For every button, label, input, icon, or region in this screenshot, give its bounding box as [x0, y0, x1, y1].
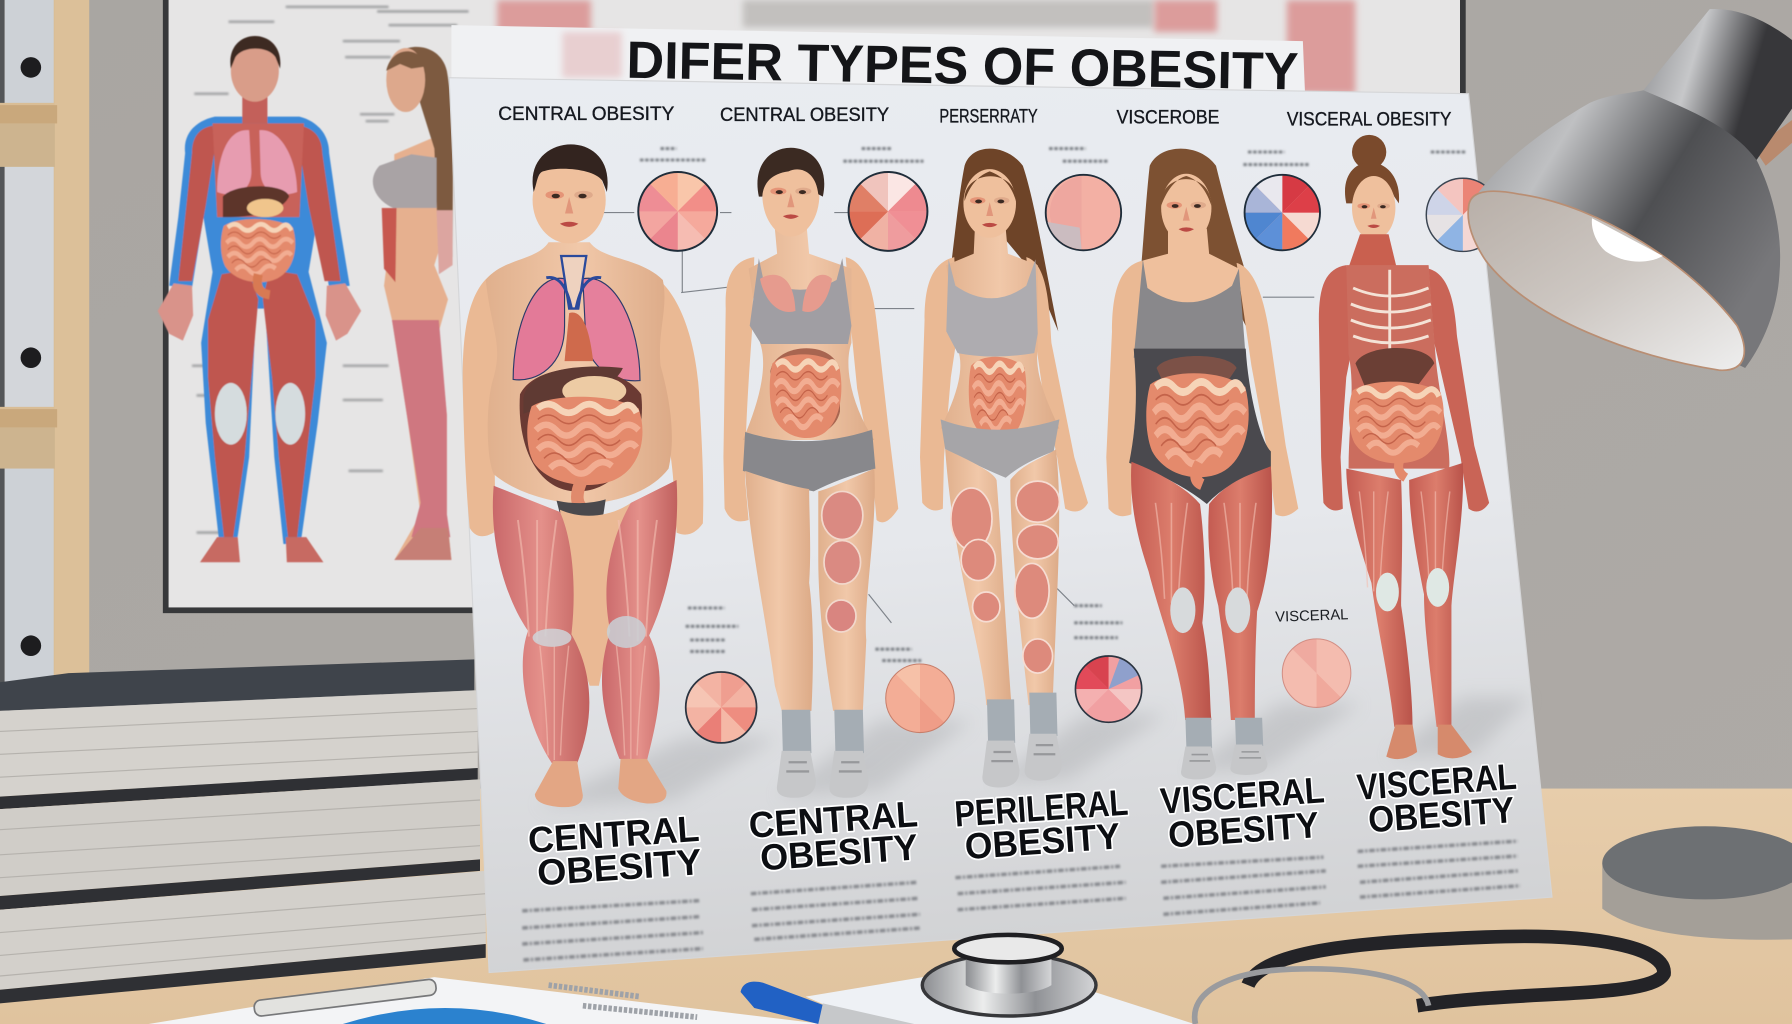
hands: [158, 283, 361, 341]
label: central obesity 2: OBESITY: [759, 826, 919, 878]
head: [963, 169, 1016, 238]
heading: visceral obesity: VISCERAL OBESITY: [1287, 109, 1451, 131]
head: [533, 157, 606, 243]
pie: lower 3: [1068, 649, 1142, 722]
heading: viscero: VISCEROBE: [1117, 106, 1219, 128]
blurred body text blocks: [522, 841, 1520, 960]
head: [762, 152, 819, 237]
pen: [741, 982, 914, 1024]
trachea and vessels: [561, 256, 586, 309]
underwear: [557, 499, 606, 519]
poster top muscle strips: [497, 0, 1355, 94]
shelf with binders: [0, 0, 89, 683]
shade neck: [1643, 9, 1792, 160]
papers on desk: [149, 963, 1194, 1024]
heading: peripheral: PERSERRATY: [939, 105, 1038, 127]
label: visceral obesity 2: OBESITY: [1367, 789, 1516, 840]
lamp base: [1602, 826, 1792, 940]
arms: [723, 257, 898, 522]
heart: [565, 313, 593, 361]
liver: [1157, 356, 1237, 389]
arms: [1319, 265, 1489, 512]
legs: [745, 471, 813, 711]
shorts: [743, 430, 875, 491]
lamp arm: [1754, 120, 1792, 166]
label: visceral obesity 2: VISCERAL: [1355, 756, 1518, 808]
shade opening: [1468, 191, 1744, 370]
callout scribbles above pies: [640, 149, 1465, 661]
figure 5: anatomy woman with bun: [1319, 135, 1489, 759]
label: visceral obesity 1: VISCERAL: [1159, 769, 1326, 822]
intestines: [1349, 382, 1444, 463]
tank top: [1134, 259, 1246, 358]
belly organ: [969, 357, 1026, 440]
shade dome: [1472, 90, 1780, 368]
background figure: front anatomy: [158, 36, 361, 562]
hair bun: [1352, 135, 1386, 169]
leg panels: [951, 481, 1059, 673]
heading: central obesity 2: CENTRAL OBESITY: [720, 104, 889, 126]
outer blue body outline: [169, 117, 350, 544]
muscle mass arms torso legs: [178, 126, 341, 281]
head: [1352, 176, 1395, 240]
pie: visceral 2: [1419, 171, 1499, 251]
title: DIFER TYPES OF OBESITY: [626, 31, 1299, 101]
abdominal cavity: [520, 369, 642, 491]
legs: [945, 449, 1011, 705]
head: [242, 89, 267, 123]
arms: [463, 274, 703, 536]
desk surface: [0, 789, 1792, 1024]
feet: [535, 761, 583, 807]
stacked books: [0, 659, 486, 1003]
lamp bulb glow: [1592, 218, 1663, 262]
figure 3: woman long hair with leg panels: [920, 149, 1088, 787]
figure 4: woman with dark shorts and muscular legs: [1106, 149, 1298, 779]
intestines: [527, 397, 642, 485]
arms: [920, 257, 1088, 512]
small visceral label: VISCERAL: [1275, 607, 1349, 626]
ribs: [1351, 270, 1431, 350]
torso: [941, 229, 1059, 429]
neck: [1349, 234, 1397, 267]
stethoscope tubing: [1195, 936, 1664, 1024]
lungs: [217, 130, 297, 195]
torso muscle: [1346, 265, 1449, 469]
arms: [1106, 261, 1298, 516]
pie: lower 1: [686, 672, 757, 750]
organs: [770, 348, 840, 436]
top: [946, 259, 1038, 357]
figure 1: obese man with organs: [463, 144, 703, 807]
stomach: [562, 376, 626, 406]
label: central obesity 2: [747, 793, 921, 879]
lungs: [513, 278, 565, 380]
pie charts: [630, 164, 1499, 750]
pie: central 1: [630, 164, 725, 259]
torso: [486, 242, 672, 504]
intestines: [1146, 373, 1249, 477]
legs: [1346, 469, 1413, 727]
lungs: [760, 275, 832, 312]
background anatomy poster: [166, 0, 1463, 610]
label: central obesity 1: [527, 808, 703, 894]
label: perileral obesity: OBESITY: [963, 815, 1121, 867]
large type labels: [527, 756, 1520, 894]
underwear: [941, 419, 1059, 478]
faint poster captions: [192, 7, 469, 533]
stethoscope chest piece: [922, 935, 1096, 1016]
torso: [743, 229, 874, 440]
pie: central 2: [840, 164, 936, 259]
leader lines: [594, 213, 1314, 623]
label: central obesity 1: OBESITY: [536, 841, 703, 893]
feet: [200, 537, 323, 562]
floor shadows under figures: [537, 697, 1531, 806]
leg muscles: [493, 486, 589, 763]
small column headings: [498, 103, 1451, 131]
top: [750, 258, 851, 344]
label: perileral obesity: [953, 782, 1132, 868]
legs: [1131, 462, 1211, 720]
background figure: side view woman: [373, 47, 453, 560]
figure 2: slim woman short hair: [723, 148, 898, 798]
hair: [1137, 149, 1264, 331]
liver: [1355, 348, 1434, 389]
label: visceral obesity 1: [1159, 769, 1328, 856]
heading: central obesity 1: CENTRAL OBESITY: [498, 103, 674, 125]
label: visceral obesity 2: [1355, 756, 1520, 841]
pie: lower 2: [886, 657, 954, 740]
label: visceral obesity 1: OBESITY: [1167, 804, 1320, 856]
pie: peripheral: [1046, 175, 1121, 250]
main poster sheet: [449, 78, 1552, 973]
head: [1161, 174, 1211, 242]
pie: lower 4: [1282, 632, 1351, 715]
liver: [523, 366, 623, 414]
shorts: [1129, 349, 1271, 504]
label: central obesity 2: CENTRAL: [747, 793, 919, 846]
label: perileral obesity: PERILERAL: [953, 782, 1129, 835]
main poster back sheet: [451, 25, 1305, 96]
feet: [1386, 725, 1472, 759]
label: central obesity 1: CENTRAL: [527, 808, 701, 861]
hair: [947, 149, 1058, 331]
desk lamp shade: [1468, 9, 1792, 370]
neck and chest: [1143, 229, 1239, 312]
thigh inner skin: [560, 503, 631, 686]
pie: visceral 1: [1237, 167, 1328, 258]
